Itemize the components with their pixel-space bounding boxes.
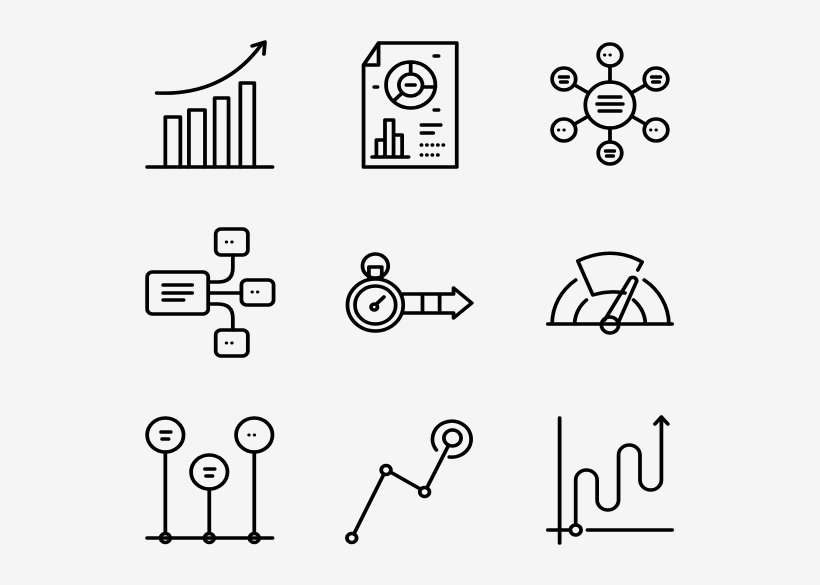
icon: line graph target: [347, 421, 471, 542]
icon: network hub: [552, 44, 668, 164]
icon: timeline pins: [147, 418, 272, 542]
icon: stopwatch arrow: [347, 254, 472, 331]
icon: growth bar chart: [147, 42, 272, 167]
icon: mind map: [147, 229, 274, 356]
icon: wavy growth chart: [548, 417, 672, 543]
icon: gauge meter: [548, 253, 672, 333]
icon: report document: [364, 43, 457, 167]
